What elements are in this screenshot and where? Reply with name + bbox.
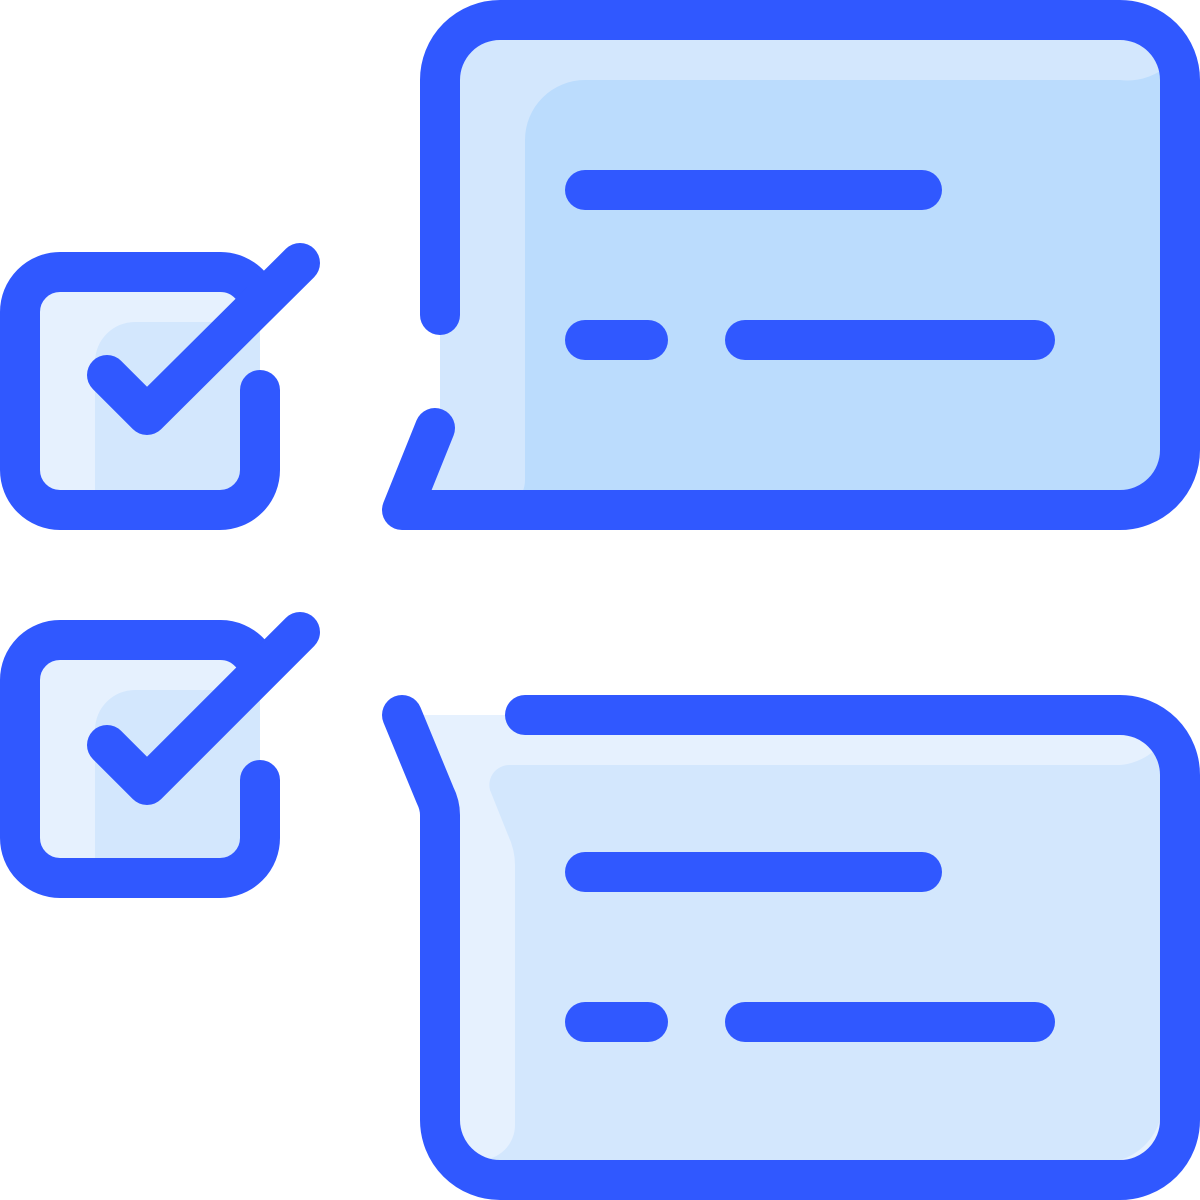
panel: bottom speech bubble bbox=[402, 715, 1180, 1180]
text lines: top bubble bbox=[585, 190, 1035, 340]
icon: checkbox 2 bbox=[20, 632, 300, 878]
panel: top speech bubble bbox=[402, 20, 1180, 510]
icon: checkbox 1 bbox=[20, 263, 300, 510]
text lines: bottom bubble bbox=[585, 872, 1035, 1022]
